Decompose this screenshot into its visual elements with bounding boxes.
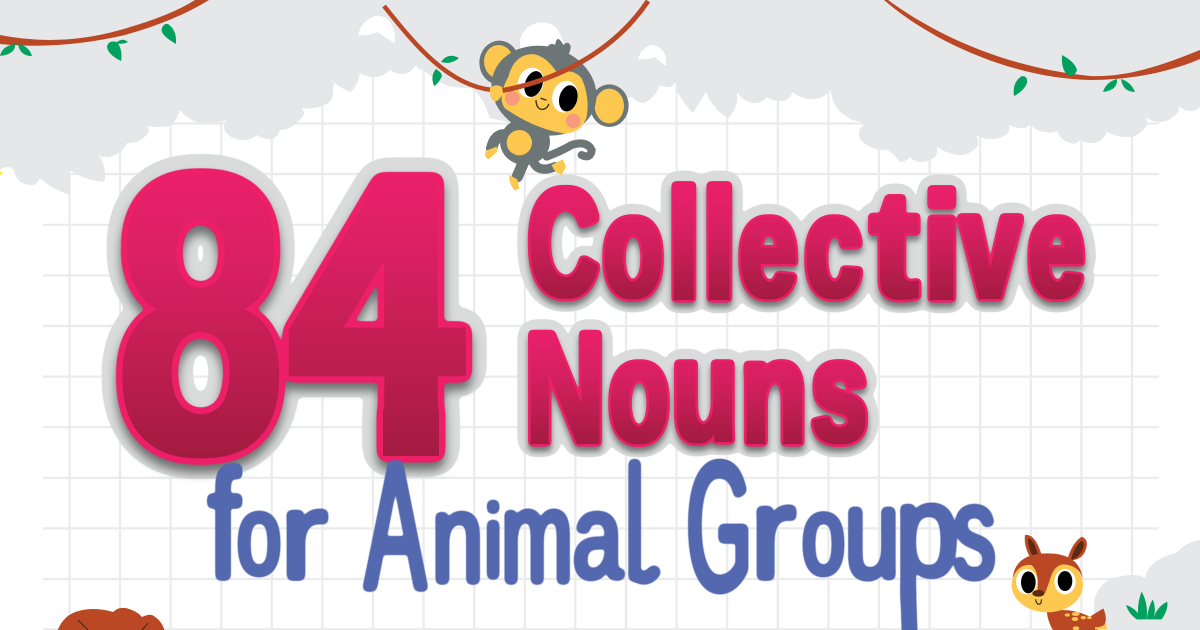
- heading: Collective: [528, 158, 1084, 331]
- brown animal head peeking bottom left: [57, 608, 165, 630]
- heading: for Animal Groups: p: [896, 458, 959, 603]
- heading: Nouns: [525, 300, 868, 476]
- number 84: 4: [291, 113, 463, 487]
- nose and mouth: [1032, 590, 1044, 597]
- heading: for Animal Groups: G: [687, 425, 752, 630]
- spots: [1065, 612, 1092, 630]
- head: [1012, 558, 1083, 612]
- heading: Collective: C: [528, 158, 598, 327]
- heading: for Animal Groups: r: [280, 466, 328, 605]
- heading: Nouns: u: [672, 310, 738, 471]
- heading: for Animal Groups: A: [365, 423, 426, 628]
- left vine: [0, 0, 209, 61]
- heading: Collective: c: [805, 167, 862, 327]
- heading: Nouns: o: [609, 313, 669, 473]
- bush: [1094, 540, 1200, 630]
- eyes: [1016, 569, 1037, 594]
- heading: for Animal Groups: s: [954, 459, 995, 606]
- heading: Nouns: N: [525, 300, 605, 476]
- monkey: [479, 32, 629, 191]
- number 84: 8: [116, 98, 285, 535]
- face: [502, 54, 588, 133]
- eyes: [514, 64, 548, 101]
- heading: for Animal Groups: r: [750, 459, 796, 606]
- heading: Collective: e: [1028, 168, 1084, 327]
- heading: for Animal Groups: f: [208, 437, 240, 611]
- heading: Nouns: n: [741, 311, 807, 474]
- cloud gaps: [358, 16, 666, 66]
- heading: for Animal Groups: l: [626, 432, 643, 613]
- monkey hand: [490, 85, 503, 102]
- heading: Collective: o: [603, 168, 663, 328]
- heading: Collective: l: [668, 158, 700, 331]
- heading: for Animal Groups: [208, 423, 995, 630]
- heading: Collective: l: [702, 158, 736, 331]
- ears: [1025, 535, 1042, 560]
- smile: [536, 98, 549, 109]
- deer body: [1047, 608, 1106, 630]
- heading: for Animal Groups: o: [802, 475, 845, 598]
- heading: Collective: v: [961, 161, 1020, 329]
- centre vine: [384, 1, 648, 102]
- hair tuft: [547, 39, 571, 60]
- deer and grass: [1012, 535, 1167, 630]
- limbs: [492, 135, 527, 177]
- feet: [485, 147, 566, 191]
- heading: for Animal Groups: i: [484, 484, 502, 600]
- heading: Collective: e: [739, 166, 797, 327]
- heading: for Animal Groups: o: [237, 474, 281, 598]
- tail: [547, 143, 592, 157]
- treetop clouds: [0, 0, 1200, 195]
- cheeks: [505, 91, 520, 106]
- leaves: [0, 24, 176, 61]
- grass: [1126, 592, 1167, 619]
- leaves: [432, 56, 459, 86]
- heading: for Animal Groups: n: [432, 466, 483, 610]
- number 84: [116, 98, 463, 535]
- right ear: [590, 84, 629, 127]
- heading: for Animal Groups: a: [573, 471, 623, 604]
- left ear: [479, 41, 519, 85]
- leaves: [1014, 55, 1135, 96]
- heading: for Animal Groups: u: [845, 462, 900, 606]
- head: [480, 32, 608, 149]
- heading: Collective: i: [922, 163, 962, 330]
- heading: Nouns: s: [812, 313, 868, 472]
- heading: for Animal Groups: m: [502, 465, 573, 610]
- heading: Collective: t: [871, 162, 919, 329]
- yellow corner mark: [0, 172, 2, 174]
- body: [500, 118, 550, 165]
- right vine: [884, 0, 1200, 96]
